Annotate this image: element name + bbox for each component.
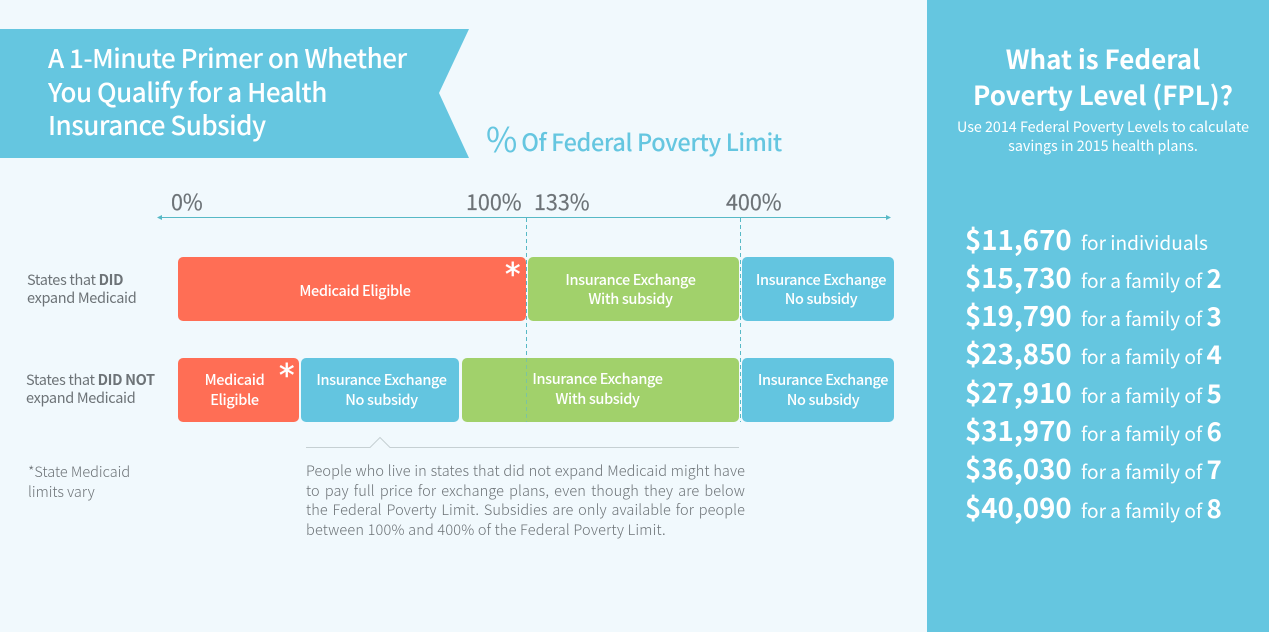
axis labels: 400% (726, 186, 782, 217)
bar: medicaid eligible, did expand (178, 257, 526, 321)
bar: exchange with subsidy, did not expand: Insurance Exchange (532, 368, 663, 389)
row label: did expand (27, 269, 136, 308)
bar: exchange no subsidy, did not expand (301, 358, 459, 422)
bar: medicaid eligible, did expand: * (505, 257, 520, 293)
panel subheading: Use 2014 Federal Poverty Levels to calculate (957, 116, 1249, 137)
bar: exchange with subsidy, did expand: With subsidy (588, 288, 673, 309)
row: family of 7: for a family of 7 (1081, 450, 1222, 487)
panel heading: Poverty Level (FPL)? (973, 76, 1233, 112)
row: individuals (965, 218, 1208, 258)
axis heading: % Of Federal Poverty Limit (486, 113, 782, 162)
callout text: to pay full price for exchange plans, even though they are below (306, 480, 745, 500)
panel heading: What is Federal (1006, 40, 1200, 77)
row: family of 4 (965, 332, 1222, 372)
row: family of 5 (965, 371, 1222, 411)
bar: exchange no subsidy, did expand: Insurance Exchange (756, 269, 886, 290)
title (48, 39, 408, 143)
footnote: *State Medicaid (28, 461, 130, 482)
FPL rows (965, 218, 1222, 526)
row: family of 7 (965, 447, 1222, 487)
callout text (306, 460, 745, 540)
axis labels: 133% (534, 186, 590, 217)
row: family of 3: for a family of 3 (1081, 297, 1222, 334)
bar: medicaid eligible, did not expand: * (279, 358, 294, 394)
panel subheading: savings in 2015 health plans. (1008, 135, 1198, 156)
bar: exchange no subsidy, did expand: No subsidy (785, 288, 857, 309)
row: family of 2 (965, 256, 1222, 296)
row: family of 3: $19,790 (965, 294, 1072, 334)
row: family of 5: for a family of 5 (1081, 374, 1222, 411)
row: family of 2: for a family of 2 (1081, 259, 1222, 296)
bar: exchange with subsidy, did expand: Insurance Exchange (565, 269, 696, 290)
bar: exchange no subsidy, did expand (742, 257, 894, 321)
row: family of 6: for a family of 6 (1081, 412, 1222, 449)
bar: medicaid eligible, did not expand: Eligible (210, 389, 259, 410)
row label: did not expand (26, 369, 155, 408)
row: family of 2: $15,730 (965, 256, 1072, 296)
row: family of 7: $36,030 (965, 447, 1072, 487)
footnote (28, 461, 130, 502)
row: family of 5: $27,910 (965, 371, 1072, 411)
bar: exchange no subsidy, above 400 percent (742, 358, 894, 422)
panel subheading (957, 116, 1249, 156)
bar: medicaid eligible, did expand: Medicaid Eligible (299, 280, 411, 301)
row: family of 3 (965, 294, 1222, 334)
callout text: between 100% and 400% of the Federal Poverty Limit. (306, 518, 666, 540)
row: individuals: for individuals (1081, 228, 1208, 256)
bar: exchange with subsidy, did expand (528, 257, 739, 321)
guide line over green bar (526, 358, 527, 422)
row: family of 8: for a family of 8 (1081, 489, 1222, 526)
title: Insurance Subsidy (48, 106, 266, 143)
title ribbon (0, 29, 469, 158)
row: family of 6: $31,970 (965, 409, 1072, 449)
row: individuals: $11,670 (965, 218, 1072, 258)
bar: exchange no subsidy, did not expand: No subsidy (345, 389, 418, 410)
row label: did expand: expand Medicaid (27, 287, 136, 308)
row label: did expand: States that DID (27, 269, 123, 290)
row: family of 4: for a family of 4 (1081, 335, 1222, 372)
bar: exchange with subsidy, did not expand: With subsidy (555, 388, 640, 409)
footnote: limits vary (28, 480, 95, 502)
panel: what is FPL (927, 0, 1269, 632)
callout text: People who live in states that did not expand Medicaid might have (306, 460, 745, 481)
panel heading (973, 40, 1233, 112)
axis labels: 0% (171, 186, 203, 217)
title: You Qualify for a Health (48, 72, 327, 110)
row: family of 6 (965, 409, 1222, 449)
bar: exchange no subsidy, above 400 percent: Insurance Exchange (758, 369, 888, 390)
row: family of 4: $23,850 (965, 332, 1072, 372)
callout text: the Federal Poverty Limit. Subsidies are only available for people (306, 499, 745, 520)
callout pointer line (306, 437, 739, 448)
axis labels (171, 186, 782, 217)
bar: medicaid eligible, did not expand: Medicaid (205, 369, 264, 390)
row: family of 8: $40,090 (965, 486, 1072, 526)
axis arrow and guide lines (157, 215, 891, 422)
bar: exchange no subsidy, did not expand: Insurance Exchange (316, 369, 447, 390)
title: A 1-Minute Primer on Whether (48, 39, 407, 76)
row label: did not expand: States that DID NOT (26, 369, 155, 390)
bar: exchange no subsidy, above 400 percent: No subsidy (787, 389, 859, 410)
row label: did not expand: expand Medicaid (26, 387, 135, 408)
bar: medicaid eligible, did not expand (178, 358, 299, 422)
bar: exchange with subsidy, did not expand (462, 358, 739, 422)
row: family of 8 (965, 486, 1222, 526)
axis labels: 100% (466, 186, 522, 217)
